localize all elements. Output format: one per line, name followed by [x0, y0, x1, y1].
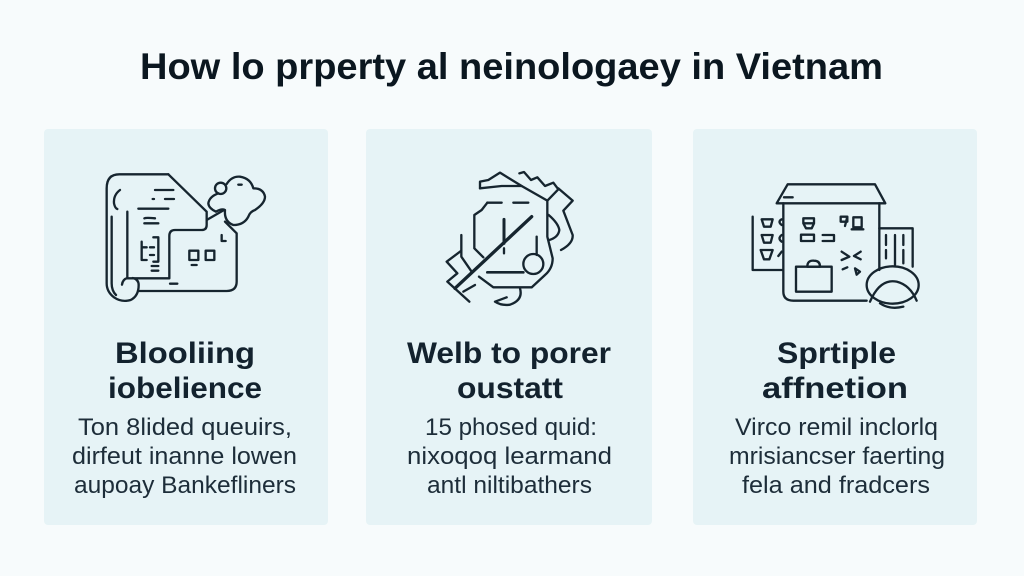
- text block: dirfeut inanne lowen: [72, 443, 297, 470]
- text block: [407, 414, 612, 499]
- heading: affnetion: [762, 372, 908, 405]
- text block: [72, 414, 297, 499]
- text block: antl niltibathers: [427, 472, 592, 499]
- text block: mrisiancser faerting: [729, 443, 945, 470]
- heading: oustatt: [457, 372, 563, 405]
- heading: Welb to porer: [407, 337, 611, 370]
- text block: 15 phosed quid:: [425, 414, 597, 441]
- panel: right card: [693, 129, 977, 525]
- heading: [108, 337, 262, 405]
- title: How lo prperty al neinologaey in Vietnam: [140, 46, 883, 87]
- text block: aupoay Bankefliners: [74, 472, 296, 499]
- heading: Sprtiple: [777, 337, 896, 370]
- text block: fela and fradcers: [742, 472, 930, 499]
- icon: crossed shield: [447, 172, 573, 305]
- heading: [407, 337, 611, 405]
- text block: [729, 414, 945, 499]
- icon: document with cloud: [107, 174, 265, 301]
- heading: Blooliing: [115, 337, 255, 370]
- heading: iobelience: [108, 372, 262, 405]
- panel: middle card: [366, 129, 652, 525]
- text block: Virco remil inclorlq: [735, 414, 938, 441]
- icon: building: [753, 184, 919, 308]
- panel: left card: [44, 129, 328, 525]
- text block: nixoqoq learmand: [407, 443, 612, 470]
- heading: [762, 337, 908, 405]
- text block: Ton 8lided queuirs,: [78, 414, 292, 441]
